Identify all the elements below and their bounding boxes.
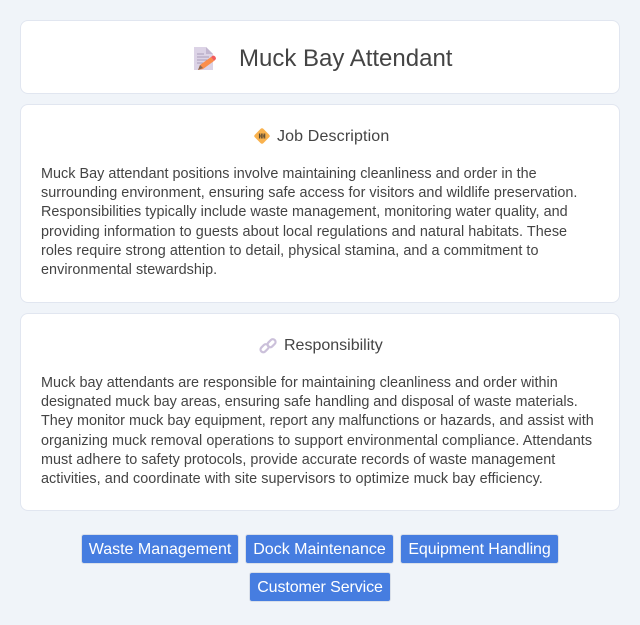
heading: job description: Job Description [277,128,389,145]
text block: responsibility [41,375,594,487]
tag: equipment handling [400,534,559,564]
tag: dock maintenance [245,534,394,564]
text block: responsibility: organizing muck removal operations to support environmental compliance. Attendants [41,433,592,449]
text block: responsibility: must adhere to safety protocols, provide accurate records of waste management [41,452,555,468]
tag: waste management [81,534,239,564]
text block: responsibility: designated muck bay areas, ensuring safe handling and disposal of waste materials. [41,394,578,410]
text block: job description: Muck Bay attendant positions involve maintaining cleanliness and order in the [41,166,537,182]
icon: document with pencil [194,47,216,70]
text block: job description: surrounding environment, ensuring safe access for visitors and wildlife preservation. [41,185,577,201]
text block: job description: Responsibilities typically include waste management, monitoring water quality, and [41,204,568,220]
panel: job description [20,104,620,303]
text block: job description [41,166,577,278]
tag: equipment handling: Equipment Handling [408,541,551,558]
text block: job description: providing information to guests about local regulations and natural habitats. These [41,224,567,240]
title: Muck Bay Attendant [239,45,452,72]
tag: customer service: Customer Service [257,579,383,596]
heading: responsibility: Responsibility [284,337,383,354]
icon: diamond road sign [254,128,270,144]
tag: dock maintenance: Dock Maintenance [253,541,386,558]
panel: responsibility [20,313,620,511]
text block: responsibility: They monitor muck bay equipment, report any malfunctions or hazards, and assist with [41,413,594,429]
panel: title card [20,20,620,94]
text block: responsibility: Muck bay attendants are responsible for maintaining cleanliness and order within [41,375,558,391]
icon: chain link [260,338,277,354]
tag: waste management: Waste Management [89,541,231,558]
text block: responsibility: activities, and coordinate with site supervisors to optimize muck bay efficiency. [41,471,543,487]
text block: job description: roles require strong attention to detail, physical stamina, and a commitment to [41,243,538,259]
text block: job description: environmental stewardship. [41,262,217,278]
tag: customer service [249,572,391,602]
